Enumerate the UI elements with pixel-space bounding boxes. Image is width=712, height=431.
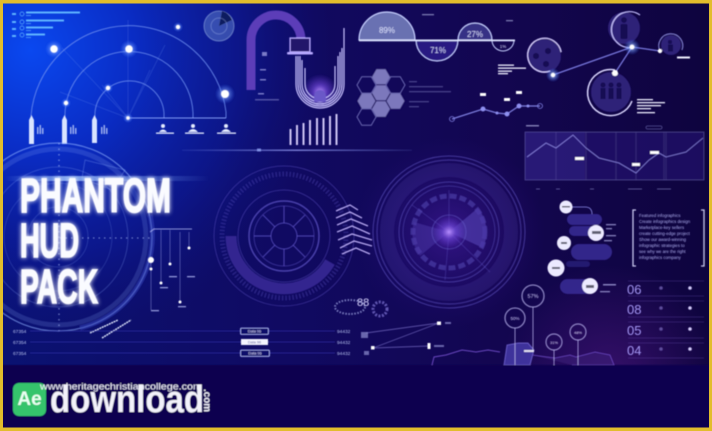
text panel with brackets: Show our award-winning <box>639 237 687 242</box>
left labels beside tube <box>255 52 279 100</box>
network: lower nodes <box>361 322 451 355</box>
circle: single person <box>608 12 640 48</box>
chart: wave percentages: 71% <box>430 46 446 55</box>
logo: Ae download.com <box>13 379 212 421</box>
callout pins <box>148 229 195 311</box>
number list: rows: 04 <box>627 343 641 358</box>
target dial <box>373 156 525 308</box>
network nodes <box>546 39 662 82</box>
title: Phantom HUD Pack: HUD <box>20 215 79 268</box>
data rows: 67354 <box>13 351 27 357</box>
circle: group of three <box>521 32 564 76</box>
chart: concentric arcs <box>31 20 235 123</box>
chart: wave percentages: 89% <box>379 26 395 35</box>
network: people circles <box>498 12 690 116</box>
data rows: 67354 <box>13 340 27 346</box>
wheel dial <box>214 166 354 306</box>
text panel with brackets: see why we are the right <box>639 249 686 254</box>
data rows: 67354 <box>13 329 27 335</box>
process bubbles <box>548 200 616 294</box>
chart: radar dial <box>204 11 234 41</box>
row buttons: Data 96 <box>248 330 261 334</box>
map with pins <box>432 285 614 365</box>
arc nodes <box>45 22 235 123</box>
chart: wave percentages: 1% <box>500 44 506 49</box>
list: top-left data rows <box>12 12 80 38</box>
network captions <box>498 56 690 113</box>
icons: people labels <box>156 124 236 134</box>
text panel with brackets: infographic strategies to <box>639 243 685 248</box>
hexagon cluster <box>357 69 405 125</box>
watermark URL: www.heritagechristiancollege.com <box>39 382 202 392</box>
chart: concentric U lines <box>296 28 344 110</box>
number list: rows: 05 <box>627 323 641 338</box>
icons: rockets with mini bars <box>29 115 108 144</box>
hexagon caption <box>409 81 451 107</box>
bottom band <box>0 365 712 431</box>
row buttons: Data 96 <box>248 352 262 356</box>
icon: Ae badge: Ae <box>17 389 42 410</box>
bar chart: rising bars <box>290 114 338 145</box>
scale line <box>182 148 412 152</box>
number list: rows: 08 <box>627 302 641 317</box>
number list: rows <box>627 281 704 358</box>
data rows <box>13 328 351 357</box>
pin: 48%: 48% <box>574 330 582 335</box>
title: Phantom HUD Pack <box>5 170 210 314</box>
small dial with digits <box>335 297 387 316</box>
text panel with brackets <box>633 210 704 266</box>
line chart panel <box>525 125 704 189</box>
small dial with digits: 88 <box>357 297 369 309</box>
row buttons <box>240 328 270 356</box>
title: Phantom HUD Pack: PACK <box>20 261 98 314</box>
row buttons: Data 96 <box>248 340 261 344</box>
chart: wave percentages <box>359 12 515 61</box>
pin: 31%: 31% <box>550 340 558 345</box>
text panel with brackets: create cutting-edge project <box>639 231 691 236</box>
zigzag labels <box>336 205 372 254</box>
pin: 50%: 50% <box>510 316 520 321</box>
text panel with brackets: Marketplace-key sellers <box>639 225 684 230</box>
circle: small person <box>659 34 683 55</box>
left HUD dial <box>0 143 152 338</box>
data rows: 94432 <box>337 351 351 357</box>
number list: rows: 06 <box>627 282 641 297</box>
wordmark suffix: .com <box>201 389 212 412</box>
icon: Ae badge <box>13 383 46 416</box>
data rows: 94432 <box>337 329 351 335</box>
circle: three people <box>588 70 632 116</box>
text panel with brackets: infographics company <box>639 255 682 260</box>
chart: small line graph <box>450 91 542 122</box>
pin: 57%: 57% <box>527 294 539 300</box>
title: Phantom HUD Pack: PHANTOM <box>20 170 171 223</box>
text panel with brackets: Featured infographics <box>639 213 681 218</box>
icon: purple tube and laptop <box>251 15 313 90</box>
wordmark: download <box>50 379 204 421</box>
data rows: 94432 <box>337 340 351 346</box>
text panel with brackets: Create infographics design <box>639 219 691 224</box>
chart: wave percentages: 27% <box>467 30 483 39</box>
